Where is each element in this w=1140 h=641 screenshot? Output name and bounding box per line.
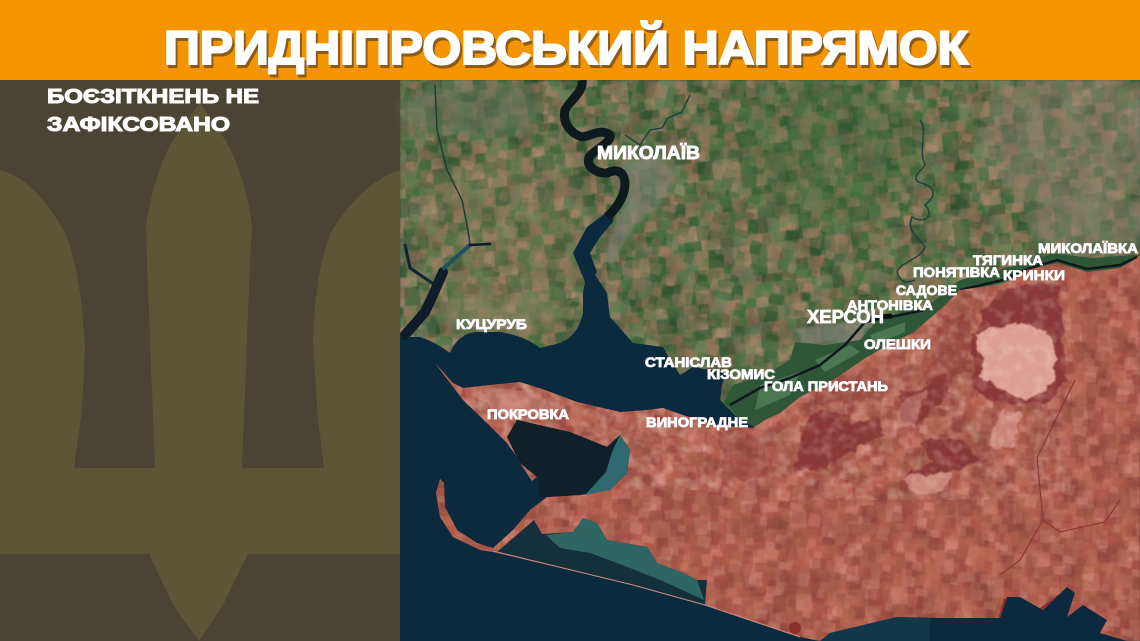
Dnipro dark channel at Kherson [868,316,892,318]
occupied territory [430,250,1140,641]
place labels: ПОКРОВКА [487,406,569,422]
forest surface texture [770,280,1070,500]
header bar [0,0,1140,80]
city: Kherson [795,320,875,345]
place labels: САДОВЕ [896,282,957,298]
title: ПРИДНІПРОВСЬКИЙ НАПРЯМОК [164,21,968,74]
Inhul river [625,95,690,145]
city: Mykolaiv [605,155,675,270]
status text: ЗАФІКСОВАНО [47,114,230,136]
place labels: КІЗОМИС [707,366,775,382]
map [400,70,1140,641]
north bank farmland [400,70,1140,450]
place labels: АНТОНІВКА [847,297,933,313]
place labels: ТЯГИНКА [973,252,1043,268]
left panel background [0,80,400,641]
place labels: КУЦУРУБ [456,316,527,332]
icon: trident watermark [0,103,400,641]
status text: БОЄЗІТКНЕНЬ НЕ [47,86,259,108]
place labels: ГОЛА ПРИСТАНЬ [764,378,888,394]
place labels: ПОНЯТІВКА [913,264,1000,280]
southern coast shadow [1000,590,1067,618]
place labels: СТАНІСЛАВ [645,354,732,370]
Dnipro river [730,257,1137,405]
sea and estuaries [400,205,800,641]
western liman [405,85,490,335]
sea base [400,80,1140,641]
place labels: КРИНКИ [1003,267,1065,283]
light sand patches [470,385,1020,497]
teal shallows on south coast [820,617,930,641]
place labels: МИКОЛАЇВ [597,143,700,163]
place labels: ВИНОГРАДНЕ [646,414,748,430]
roads and canals [1000,380,1120,575]
Inhulets river [897,120,933,282]
place labels [456,143,1138,430]
dark forest patches [720,282,1066,482]
place labels: ХЕРСОН [807,307,884,327]
place labels: МИКОЛАЇВКА [1038,240,1138,256]
Southern Bug river [564,80,625,217]
Dnipro delta wetlands [724,253,1140,432]
delta marsh texture [755,277,1020,410]
place labels: ОЛЕШКИ [864,336,931,352]
upper lagoon [507,420,630,497]
status text [47,86,259,136]
lower lagoon [493,518,800,637]
pale sand massif [975,323,1056,399]
